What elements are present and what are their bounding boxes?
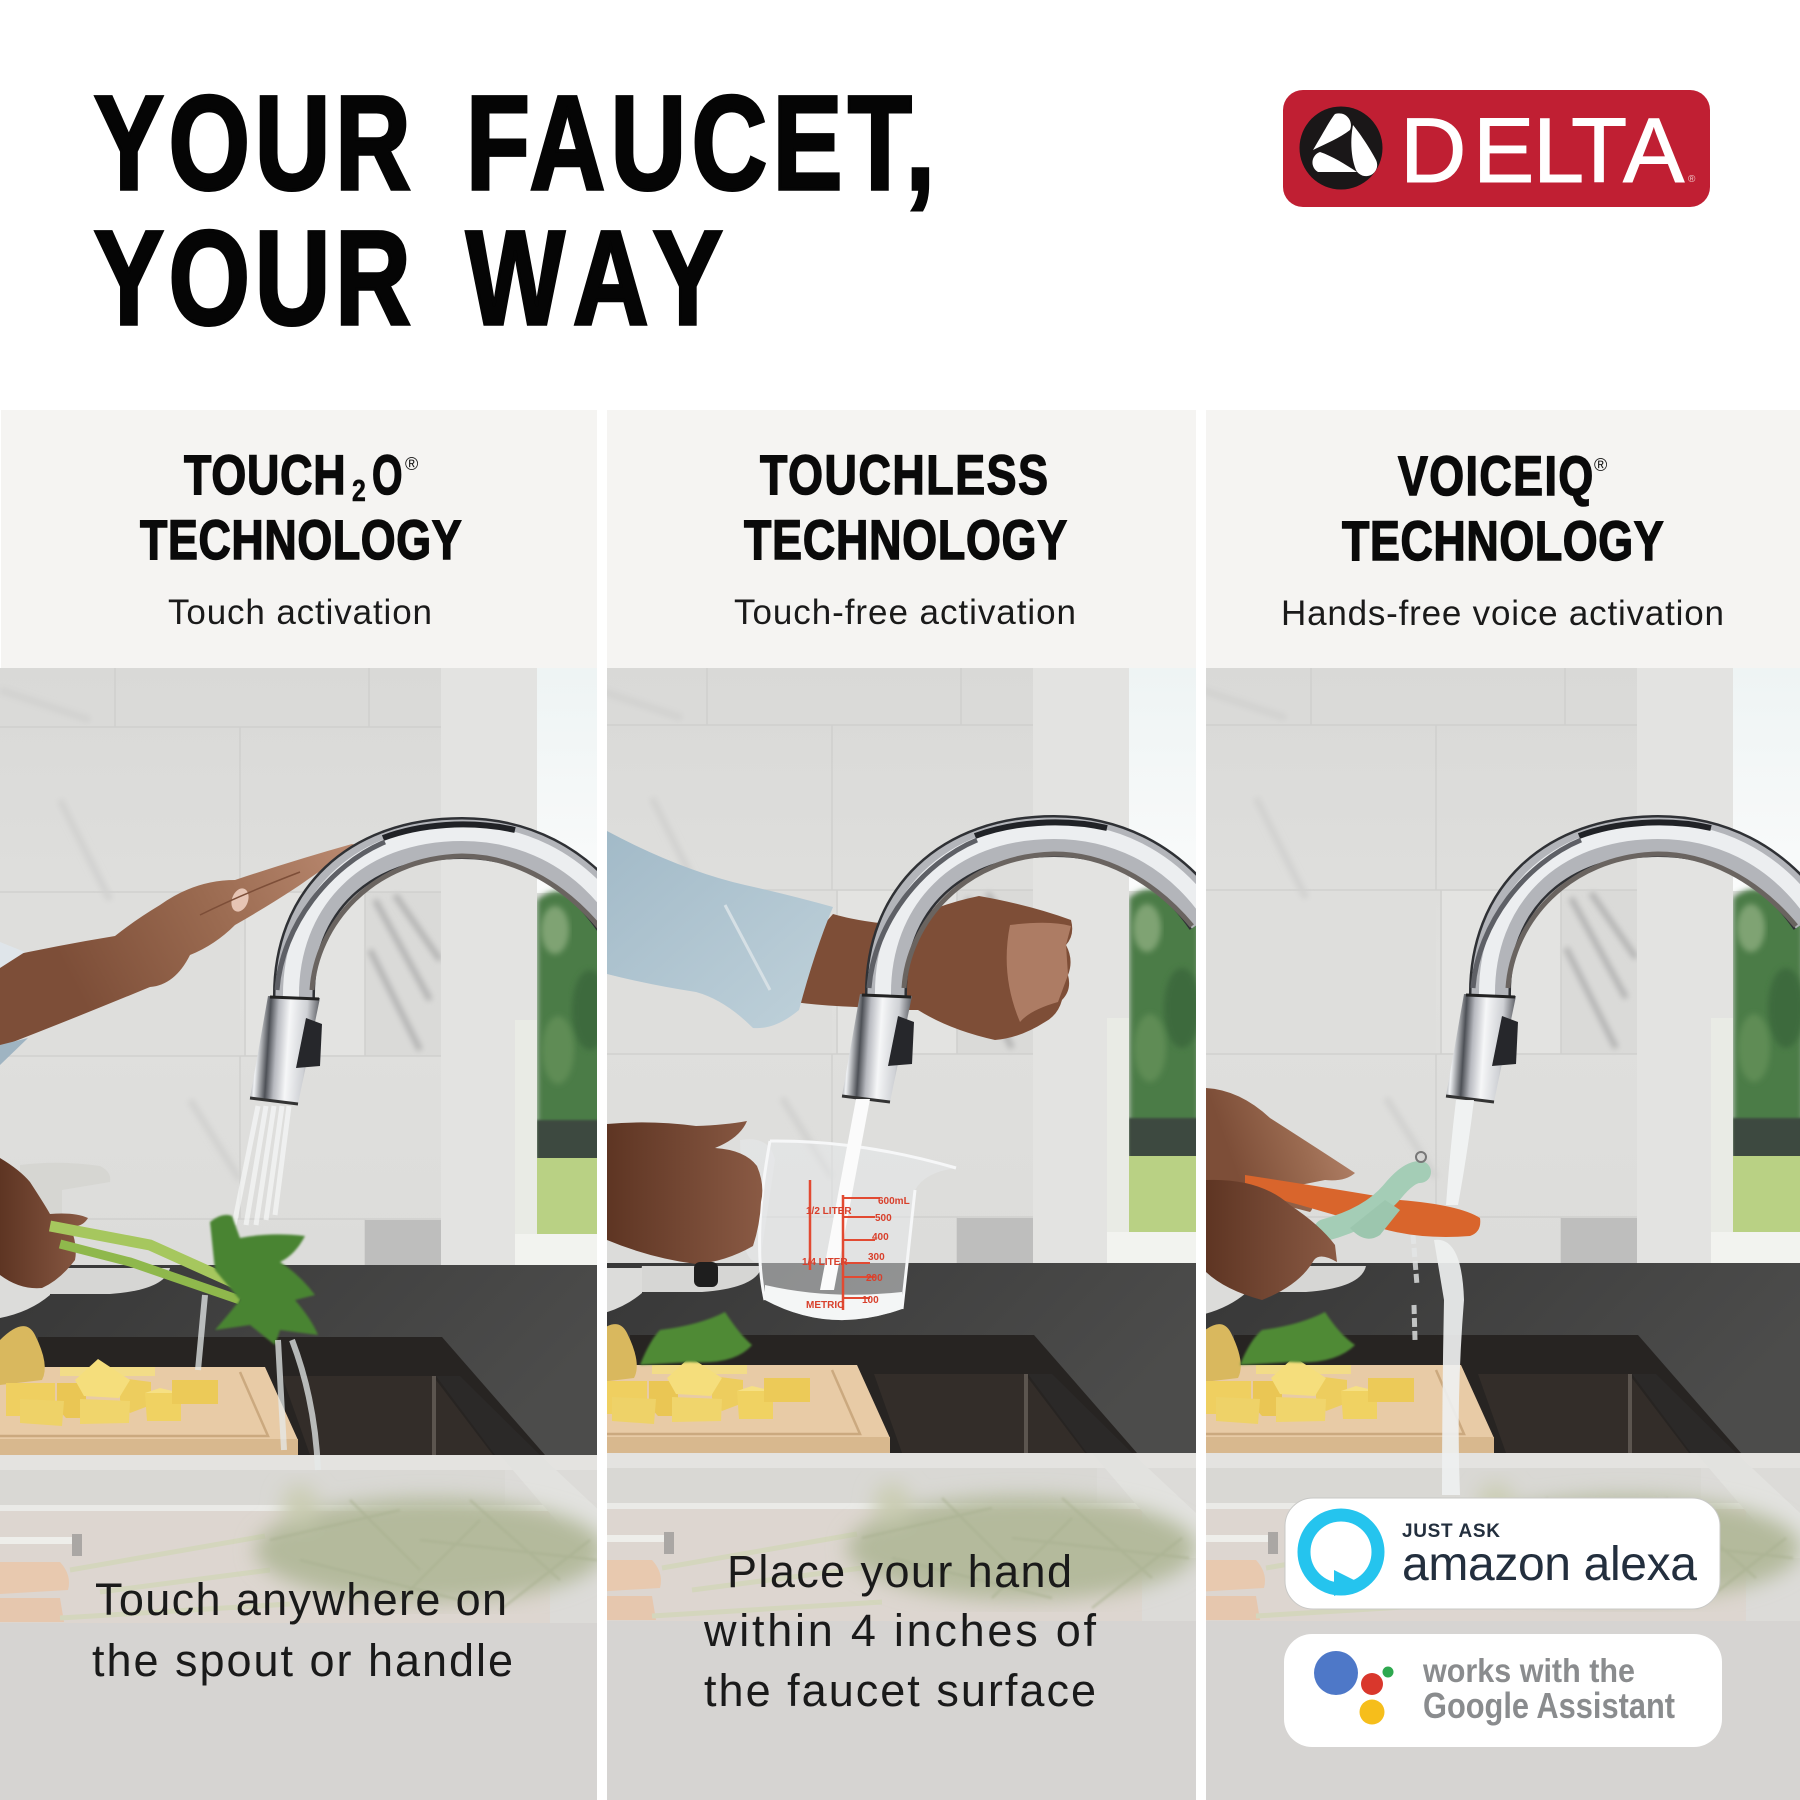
icon: celery on board: [1240, 1312, 1355, 1365]
badge: Amazon Alexa: JUST ASK: [1402, 1521, 1500, 1542]
Delta logo: [1283, 90, 1710, 207]
caption: Touchless: [703, 1546, 1096, 1716]
icon: Alexa ring: [1304, 1515, 1378, 1596]
measuring cup: METRIC: [806, 1300, 844, 1311]
panel header: Touchless: Touch-free activation: [734, 593, 1076, 632]
title: FAUCET,: [466, 69, 935, 218]
icon: carrot: [1245, 1175, 1480, 1237]
measuring cup: [740, 1099, 956, 1320]
badge: Amazon Alexa: amazon alexa: [1402, 1538, 1697, 1591]
panel header: Touchless: [607, 410, 1196, 668]
photo: hand touching faucet spout while rinsing celery: [0, 668, 620, 1800]
panel: Touch2O technology: [0, 410, 620, 1800]
water drips: [198, 1295, 318, 1470]
panel header: VoiceIQ: VOICEIQ: [1398, 444, 1593, 507]
icon: mint peeler: [1325, 1152, 1426, 1239]
panel: Touchless technology: [592, 410, 1212, 1800]
measuring cup: 500: [875, 1213, 892, 1224]
icon: hand holding celery: [0, 1158, 318, 1345]
measuring cup: 200: [866, 1273, 883, 1284]
panel header: Touch2O: [1, 410, 597, 668]
caption: Touchless: Place your hand: [727, 1546, 1072, 1597]
panel header: Touch2O: ®: [405, 454, 418, 474]
icon: hand holding cup: [607, 1121, 762, 1264]
photo: arm near faucet and measuring cup: [592, 666, 1212, 1800]
panel header: Touch2O: 2: [352, 473, 366, 508]
Delta logo: ®: [1688, 174, 1696, 185]
Delta logo: DELTA: [1400, 100, 1685, 202]
panel header: Touch2O: TOUCH: [184, 443, 346, 506]
panel header: Touchless: TECHNOLOGY: [744, 508, 1067, 571]
icon: arm and fist: [801, 896, 1072, 1040]
panel header: Touch2O: Touch activation: [168, 593, 432, 632]
badge: Google Assistant: [1284, 1634, 1722, 1747]
title: [94, 69, 935, 353]
photo: hands peeling carrot under faucet: [1196, 666, 1800, 1800]
title: WAY: [466, 204, 723, 353]
caption: Touch2O: Touch anywhere on: [95, 1574, 507, 1625]
water stream: [1434, 1100, 1474, 1495]
panel header: Touchless: TOUCHLESS: [760, 443, 1048, 506]
panel header: VoiceIQ: Hands-free voice activation: [1281, 594, 1724, 633]
icon: forearm and hand: [0, 844, 357, 1065]
caption: Touchless: the faucet surface: [704, 1665, 1096, 1716]
caption: Touch2O: [92, 1574, 513, 1686]
icon: Google Assistant dots: [1314, 1651, 1394, 1724]
panel header: Touch2O: O: [372, 444, 402, 507]
title: YOUR: [94, 204, 411, 353]
panel header: VoiceIQ: [1206, 410, 1800, 668]
caption: Touchless: within 4 inches of: [703, 1605, 1096, 1656]
panel header: VoiceIQ: TECHNOLOGY: [1342, 509, 1664, 572]
icon: lower hand: [1206, 1180, 1337, 1300]
water drops: [1413, 1235, 1417, 1340]
water spray: [234, 1106, 289, 1225]
caption: Touch2O: the spout or handle: [92, 1635, 513, 1686]
badge: Google Assistant: works with the: [1422, 1652, 1635, 1689]
measuring cup: 100: [862, 1295, 879, 1306]
panel header: VoiceIQ: ®: [1594, 455, 1607, 475]
icon: celery on board: [640, 1312, 752, 1365]
title: YOUR: [94, 69, 411, 218]
badge: Google Assistant: Google Assistant: [1423, 1685, 1675, 1726]
measuring cup: 600mL: [878, 1196, 910, 1207]
icon: upper hand: [1206, 1088, 1355, 1212]
badge: Amazon Alexa: [1285, 1498, 1720, 1609]
measuring cup: 1/4 LITER: [802, 1257, 848, 1268]
panel: VoiceIQ technology: [1196, 410, 1800, 1800]
icon: handle of bowl: [694, 1262, 718, 1287]
panel header: Touch2O: TECHNOLOGY: [140, 508, 462, 571]
measuring cup: 1/2 LITER: [806, 1206, 852, 1217]
measuring cup: 300: [868, 1252, 885, 1263]
measuring cup: 400: [872, 1232, 889, 1243]
icon: denim sleeve: [607, 831, 833, 1028]
